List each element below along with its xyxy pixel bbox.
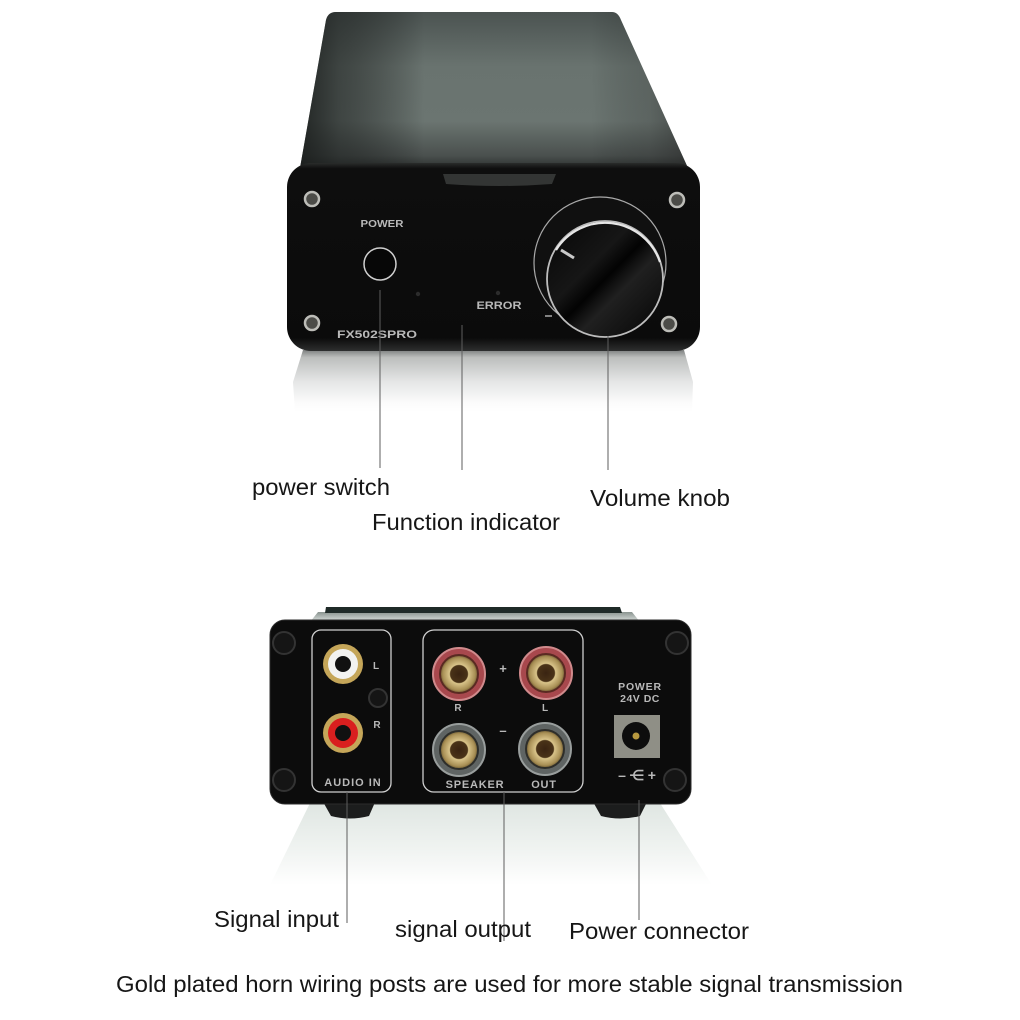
model label: FX502SPRO [337,329,418,341]
label: signal output: signal output [395,916,532,942]
power button [364,248,396,280]
volume knob [534,197,666,337]
audio input group: R [373,720,381,731]
audio input group [312,630,391,792]
label: power switch: power switch [252,474,390,500]
indicator LEDs and error label [416,291,522,312]
rear panel screws [273,632,688,791]
speaker output group: SPEAKER [446,779,504,791]
power label: 24V DC [620,693,660,705]
amplifier front panel [287,163,700,351]
speaker output group: – [499,723,507,738]
DC power socket [614,715,660,758]
audio input group: AUDIO IN [324,777,382,789]
leader line: signal input [346,792,348,923]
leader line: function indicator [461,325,463,470]
front panel screws [305,192,684,331]
rubber feet [322,800,648,818]
leader line: volume knob [607,336,609,470]
speaker output group [423,630,583,792]
photo: amplifier rear view [270,607,712,885]
amplifier top surface [300,12,688,168]
panel highlight [443,174,556,186]
photo: amplifier front view [287,12,700,412]
speaker output group: L [542,703,548,714]
floor reflection [270,803,712,885]
label: power connector: Power connector [569,918,749,944]
power label: POWER [360,218,404,230]
polarity symbol: – ⋲ + [618,767,656,783]
power label [618,681,662,705]
audio input group: L [373,661,379,672]
leader line: power switch [379,290,381,468]
speaker output group: OUT [531,779,557,791]
label: signal input: Signal input [214,906,340,932]
caption: Gold plated horn wiring posts are used for more stable signal transmission [116,971,903,997]
leader line: power connector [638,800,640,920]
speaker output group: + [499,661,507,676]
label: function indicator: Function indicator [372,509,560,535]
leader line: signal output [503,792,505,941]
label: volume knob: Volume knob [590,485,730,511]
speaker output group: R [454,703,462,714]
top edge [310,607,640,622]
indicator LEDs and error label: ERROR [476,300,522,312]
rear panel [270,620,691,804]
floor reflection [293,350,693,412]
power label: POWER [618,681,662,693]
